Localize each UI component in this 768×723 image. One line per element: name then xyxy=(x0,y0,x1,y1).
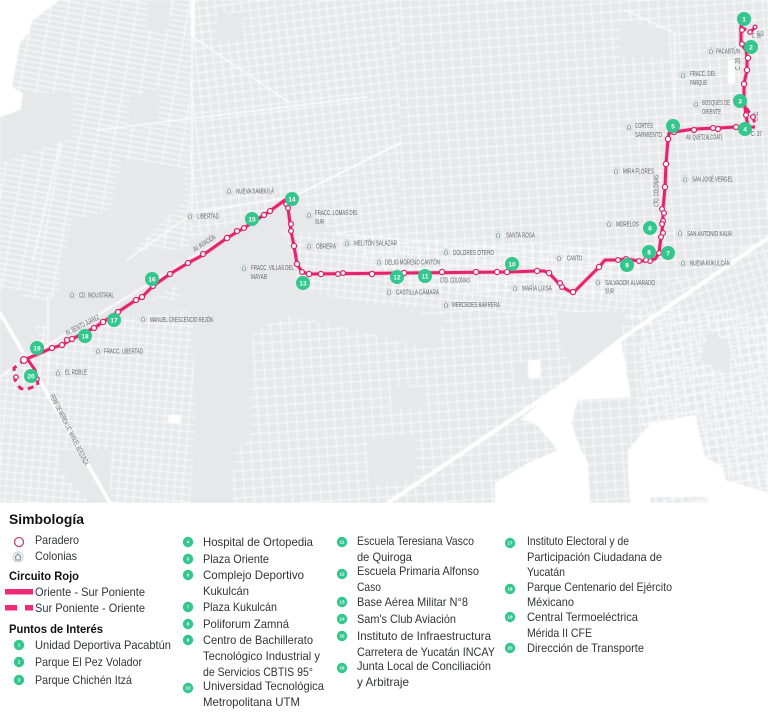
point 11: de Quiroga xyxy=(357,551,413,564)
map label: Cortés Sarmiento: CORTÉS xyxy=(635,121,653,130)
point 7: 7 xyxy=(187,605,190,610)
map label: Cd. Industrial xyxy=(69,290,114,300)
point 6: 6 xyxy=(187,573,190,578)
point 11 xyxy=(337,535,474,564)
map label: Cto. Colonias vertical: CTO. COLONIAS xyxy=(652,175,660,207)
point 19: Mérida II CFE xyxy=(527,627,592,640)
map label: Av. Quetzalcóatl: AV. QUETZALCÓATL xyxy=(686,132,723,142)
map label: Fracc. Libertad: FRACC. LIBERTAD xyxy=(104,346,143,356)
point 8: 8 xyxy=(187,622,190,627)
point 7: Plaza Kukulcán xyxy=(203,601,277,614)
map markers: points of interest: 15 xyxy=(248,216,256,224)
point 9: 9 xyxy=(187,638,190,643)
point 16: y Arbitraje xyxy=(357,676,409,689)
map label: Fracc. Villas del Mayab: MAYAB xyxy=(251,272,267,281)
map label: San José Vergel xyxy=(682,174,733,184)
map label: street numbers: C. 31 xyxy=(751,112,760,121)
point 12 xyxy=(337,565,479,594)
map label: Cortés Sarmiento xyxy=(626,121,662,139)
map label: Morelos: MORELOS xyxy=(616,220,639,228)
point 20: 20 xyxy=(507,646,513,651)
map markers: points of interest: 17 xyxy=(110,318,118,324)
map markers: points of interest: 10 xyxy=(508,262,516,268)
point 15: Carretera de Yucatán INCAY xyxy=(357,646,495,659)
legend: Colonias: Colonias xyxy=(35,550,77,563)
route glow xyxy=(24,25,755,360)
map label: Fracc. Lomas del Sur: FRACC. LOMAS DEL xyxy=(315,208,358,217)
map label: Bosques de Oriente xyxy=(693,98,730,116)
map markers: points of interest: 8 xyxy=(647,250,651,256)
map label: Nueva Sambulá xyxy=(226,186,274,196)
heading: Circuito Rojo: Circuito Rojo xyxy=(9,571,79,583)
map label: San Antonio Kaua: SAN ANTONIO KAUA xyxy=(687,229,732,238)
map label: Castilla Cámara: CASTILLA CÁMARA xyxy=(396,288,439,296)
map markers: points of interest: 2 xyxy=(749,44,753,52)
point 4: 4 xyxy=(187,540,190,545)
map label: Melitón Salazar xyxy=(344,238,397,248)
point 9: de Servicios CBTIS 95° xyxy=(203,666,313,679)
map label: Salvador Alvarado Sur xyxy=(595,278,655,296)
map label: Canto: CANTO xyxy=(567,254,582,262)
legend: Paradero: Paradero xyxy=(35,534,79,547)
legend: Oriente - Sur Poniente: Oriente - Sur Poniente xyxy=(35,586,145,599)
map label: María Luisa: MARÍA LUISA xyxy=(522,284,552,292)
map label: El Roble: EL ROBLE xyxy=(65,368,87,376)
legend points column 4 xyxy=(505,535,672,655)
map label: Nueva Sambulá: NUEVA SAMBULÁ xyxy=(236,186,274,196)
map label: Fracc. del Parque: PARQUE xyxy=(690,78,707,87)
point 10 xyxy=(183,680,325,709)
map label: Cto. Colonias: CTO. COLONIAS xyxy=(440,276,470,284)
map markers: points of interest: 11 xyxy=(422,274,429,280)
map markers: points of interest: 6 xyxy=(648,226,652,232)
heading: Puntos de Interés: Puntos de Interés xyxy=(9,624,103,636)
map label: Mira Flores: MIRA FLORES xyxy=(623,166,654,176)
map label: Cortés Sarmiento: SARMIENTO xyxy=(635,130,662,139)
point 12: Escuela Primaria Alfonso xyxy=(357,565,479,578)
point 8: Poliforum Zamná xyxy=(203,618,290,631)
point 1: 1 xyxy=(18,643,21,648)
point 19 xyxy=(505,611,639,640)
legend: Sur Poniente - Oriente: Sur Poniente - Oriente xyxy=(35,602,145,615)
map markers: points of interest: 20 xyxy=(27,374,35,380)
map label: El Roble xyxy=(55,368,87,376)
point 2: 2 xyxy=(18,660,21,665)
point 2: Parque El Pez Volador xyxy=(35,656,142,669)
map markers: points of interest xyxy=(24,12,758,383)
map label: Nueva Kukulcán xyxy=(680,258,730,268)
point 9 xyxy=(183,634,320,679)
point 17 xyxy=(505,535,662,579)
point 12: 12 xyxy=(339,572,345,577)
point 4: Hospital de Ortopedia xyxy=(203,536,314,549)
map markers: points of interest: 18 xyxy=(81,334,89,340)
legend title: Simbología: Simbología xyxy=(9,511,84,527)
point 18: Méxicano xyxy=(527,596,574,609)
point 6 xyxy=(183,569,304,598)
point 19: Central Termoeléctrica xyxy=(527,611,639,624)
point 16 xyxy=(337,660,491,689)
base map xyxy=(0,0,768,503)
point 17: Instituto Electoral y de xyxy=(527,535,629,548)
map label: Av. Benito Juárez: AV. BENITO JUÁREZ xyxy=(64,312,101,337)
blank gray blocks xyxy=(0,0,730,503)
point 17: Yucatán xyxy=(527,566,565,579)
point 5: 5 xyxy=(187,557,190,562)
point 6: Complejo Deportivo xyxy=(203,569,304,582)
route stops xyxy=(14,25,757,381)
point 18: Parque Centenario del Ejército xyxy=(527,581,672,594)
point 19: 19 xyxy=(507,615,513,620)
map label: Fracc. del Parque: FRACC. DEL xyxy=(690,69,716,78)
point 18 xyxy=(505,581,672,609)
map label: Castilla Cámara xyxy=(386,288,439,296)
map label: Morelos xyxy=(606,220,639,228)
point 1: Unidad Deportiva Pacabtún xyxy=(35,639,171,652)
map markers: points of interest: 3 xyxy=(738,98,742,106)
map label: Obrera: OBRERA xyxy=(316,242,336,250)
point 10: Universidad Tecnológica xyxy=(203,680,325,693)
point 14: Sam's Club Aviación xyxy=(357,613,456,626)
map label: San Antonio Kaua xyxy=(677,229,732,238)
map markers: points of interest: 16 xyxy=(148,276,156,284)
point 3: Parque Chichén Itzá xyxy=(35,674,132,687)
point 16: 16 xyxy=(339,666,345,671)
map label: street numbers xyxy=(733,29,764,138)
point 3: 3 xyxy=(18,678,21,683)
point 9: Centro de Bachillerato xyxy=(203,634,313,647)
map label: Dolores Otero: DOLORES OTERO xyxy=(453,248,494,257)
map label: Delio Moreno Cantón xyxy=(376,258,440,266)
point 17: Participación Ciudadana de xyxy=(527,551,662,564)
map label: Salvador Alvarado Sur: SALVADOR ALVARADO xyxy=(605,278,655,287)
route: Sur Poniente - Oriente (dashed) xyxy=(14,27,756,390)
point 11: 11 xyxy=(340,540,345,545)
point 10: 10 xyxy=(185,686,191,691)
map label: Melitón Salazar: MELITÓN SALAZAR xyxy=(354,238,397,248)
map label: Bosques de Oriente: BOSQUES DE xyxy=(702,98,730,107)
point 16: Junta Local de Conciliación xyxy=(357,660,491,673)
map label: Canto xyxy=(556,254,582,262)
map label: Fracc. Lomas del Sur xyxy=(306,208,358,226)
point 5: Plaza Oriente xyxy=(203,553,269,566)
map label: San José Vergel: SAN JOSÉ VERGEL xyxy=(692,174,733,184)
legend points column 3 xyxy=(337,535,495,689)
map label: street numbers: C. 28 xyxy=(733,58,742,70)
map label: Dolores Otero xyxy=(443,248,494,257)
map label: Fracc. Villas del Mayab xyxy=(241,263,294,281)
legend: Paradero xyxy=(14,534,79,547)
point 12: Caso xyxy=(357,581,381,594)
map markers: points of interest: 5 xyxy=(671,124,675,130)
map markers: points of interest: 9 xyxy=(625,262,629,270)
map markers: points of interest: 13 xyxy=(299,280,307,288)
point 10: Metropolitana UTM xyxy=(203,696,300,709)
point 9: Tecnológico Industrial y xyxy=(203,650,320,663)
map label: Fracc. del Parque xyxy=(680,69,716,87)
map label: Av. Aviación: AV. AVIACIÓN xyxy=(191,233,217,254)
point 17: 17 xyxy=(507,541,513,546)
map label: Fracc. Libertad xyxy=(95,346,143,356)
map markers: points of interest: 14 xyxy=(288,196,296,204)
route: Oriente - Sur Poniente xyxy=(24,25,755,379)
map markers: points of interest: 4 xyxy=(743,126,747,134)
point 15: Instituto de Infraestructura xyxy=(357,630,492,643)
point 14: 14 xyxy=(339,617,345,622)
map markers: points of interest: 19 xyxy=(33,346,41,352)
map label: Delio Moreno Cantón: DELIO MORENO CANTÓN xyxy=(385,258,440,266)
map label: Salvador Alvarado Sur: SUR xyxy=(605,286,614,296)
legend points column 1 xyxy=(14,639,171,687)
white unmapped areas xyxy=(0,0,768,503)
map label: Fracc. Villas del Mayab: FRACC. VILLAS DEL xyxy=(251,263,294,272)
map label: María Luisa xyxy=(512,284,552,292)
map label: Manuel Crescencio Rejón xyxy=(140,315,213,324)
point 13: Base Aérea Militar N°8 xyxy=(357,596,468,609)
map label: Santa Rosa: SANTA ROSA xyxy=(506,230,535,240)
point 18: 18 xyxy=(507,587,513,592)
point 20: Dirección de Transporte xyxy=(527,642,644,655)
map markers: points of interest: 12 xyxy=(393,274,401,282)
legend points column 2 xyxy=(183,536,325,709)
map label: Libertad xyxy=(187,212,219,220)
map label: Cd. Industrial: CD. INDUSTRIAL xyxy=(79,290,114,300)
map label: Libertad: LIBERTAD xyxy=(197,212,219,220)
map label: Santa Rosa xyxy=(495,230,535,240)
map label: Pacabtún xyxy=(708,46,740,56)
map label: Pacabtún: PACABTÚN xyxy=(716,46,740,56)
map label: Periférico: PERIF. DE MÉRIDA LIC. MANUEL BERZUNZA xyxy=(48,393,91,466)
point 15: 15 xyxy=(339,634,345,639)
map markers: points of interest: 7 xyxy=(666,250,670,258)
map label: Nueva Kukulcán: NUEVA KUKULCÁN xyxy=(690,258,730,268)
point 6: Kukulcán xyxy=(203,585,249,598)
map label: Mercedes Barrera: MERCEDES BARRERA xyxy=(452,300,500,309)
map label: Bosques de Oriente: ORIENTE xyxy=(702,107,721,116)
legend: Colonias xyxy=(13,550,77,563)
map label: Mira Flores xyxy=(613,166,654,176)
point 11: Escuela Teresiana Vasco xyxy=(357,535,474,548)
map label: Obrera xyxy=(306,242,336,250)
point 13: 13 xyxy=(339,600,345,605)
map label: Mercedes Barrera xyxy=(443,300,500,309)
point 15 xyxy=(337,630,495,659)
map label: Fracc. Lomas del Sur: SUR xyxy=(315,217,324,226)
map label: Manuel Crescencio Rejón: MANUEL CRESCENCIO REJÓN xyxy=(150,315,213,324)
map markers: points of interest: 1 xyxy=(742,16,746,24)
